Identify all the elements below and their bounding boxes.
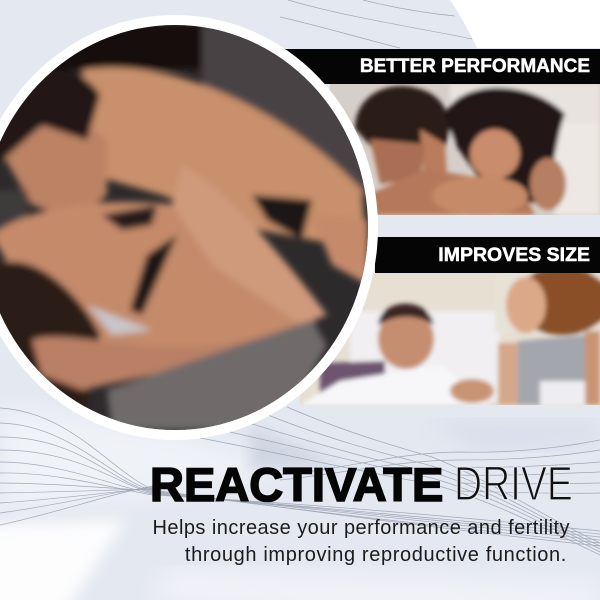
banner: improves size	[375, 237, 600, 273]
heading word: drive: DRIVE	[454, 458, 573, 511]
circular photo with white ring	[0, 15, 378, 440]
body text	[152, 517, 570, 566]
photo panel: top right	[330, 84, 600, 215]
photo panel: bottom right	[300, 273, 600, 405]
banner: better performance: BETTER PERFORMANCE	[360, 56, 590, 77]
body text: Helps increase your performance and fertility	[152, 517, 570, 539]
heading: reactivate drive	[150, 458, 573, 511]
banner: improves size: IMPROVES SIZE	[438, 244, 590, 266]
heading word: reactivate: REACTIVATE	[150, 458, 443, 511]
banner: better performance	[283, 49, 600, 84]
body text: through improving reproductive function.	[185, 544, 567, 566]
